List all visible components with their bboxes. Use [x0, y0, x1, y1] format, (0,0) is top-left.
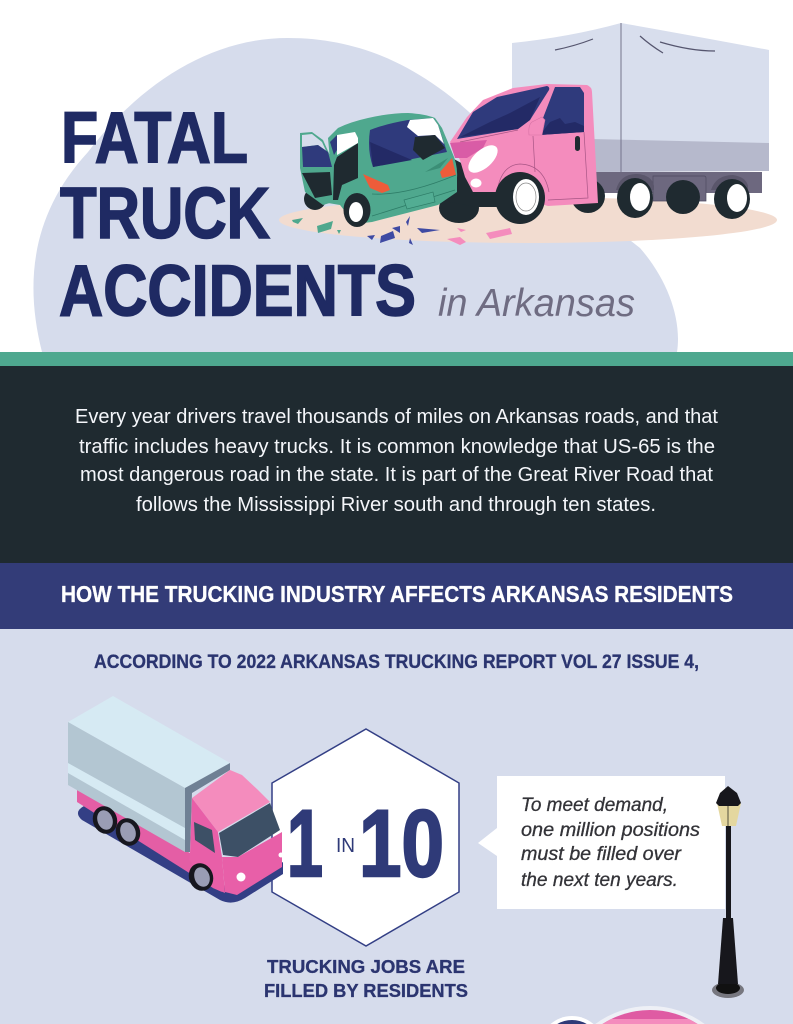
callout text: one million positions	[521, 820, 701, 841]
callout text: the next ten years.	[521, 870, 678, 891]
partial circle: pink	[595, 1006, 705, 1024]
stat caption: FILLED BY RESIDENTS	[264, 980, 468, 1001]
source line: ACCORDING TO 2022 ARKANSAS TRUCKING REPORT VOL 27 ISSUE 4,	[94, 652, 699, 673]
illustration: crashed truck	[439, 23, 769, 224]
illustration: green car	[300, 113, 457, 227]
green divider bar	[0, 352, 793, 366]
car open side	[333, 143, 358, 200]
truck wheels	[89, 803, 217, 894]
icon: street lamp	[712, 786, 744, 998]
number one: 1	[287, 791, 323, 897]
panel: section heading band	[0, 563, 793, 629]
truck bumper	[440, 158, 500, 207]
intro paragraph: traffic includes heavy trucks. It is common knowledge that US-65 is the	[79, 436, 715, 458]
truck front wheel	[495, 172, 545, 224]
car bumper lines	[372, 175, 456, 216]
car rear wheel	[344, 193, 370, 227]
panel: intro	[0, 366, 793, 563]
intro paragraph	[75, 406, 718, 516]
title	[59, 98, 416, 332]
truck cab	[450, 84, 598, 206]
intro paragraph: most dangerous road in the state. It is part of the Great River Road that	[80, 464, 713, 486]
broken glass	[407, 118, 444, 144]
callout	[478, 776, 725, 909]
stat caption	[264, 956, 468, 1001]
truck far wheels	[439, 179, 700, 223]
car tail lights	[363, 174, 390, 193]
intro paragraph: follows the Mississippi River south and through ten states.	[136, 494, 656, 516]
section heading: HOW THE TRUCKING INDUSTRY AFFECTS ARKANSAS RESIDENTS	[61, 581, 733, 607]
partial circle: navy	[550, 1016, 594, 1024]
car rear left wheel	[304, 188, 326, 210]
car door	[300, 132, 333, 205]
subtitle: in Arkansas	[438, 282, 635, 325]
crash debris	[292, 216, 512, 245]
hexagon stat	[272, 729, 459, 946]
ground ellipse	[279, 197, 777, 243]
panel: statistics	[0, 629, 793, 1024]
title: FATAL	[61, 98, 248, 178]
icon: isometric truck	[68, 696, 284, 903]
stat caption: TRUCKING JOBS ARE	[267, 956, 465, 977]
word in: IN	[336, 835, 355, 857]
title: TRUCK	[60, 174, 270, 254]
truck chassis	[595, 172, 762, 201]
callout text: must be filled over	[521, 844, 682, 865]
truck rear wheels	[616, 174, 750, 219]
car rear window	[369, 118, 447, 167]
hero background blob	[33, 38, 678, 352]
callout text	[521, 795, 701, 891]
callout text: To meet demand,	[521, 795, 668, 816]
title: ACCIDENTS	[59, 252, 416, 332]
truck cargo box	[512, 23, 769, 172]
car body	[328, 113, 457, 224]
number ten: 10	[359, 791, 444, 897]
intro paragraph: Every year drivers travel thousands of miles on Arkansas roads, and that	[75, 406, 718, 428]
